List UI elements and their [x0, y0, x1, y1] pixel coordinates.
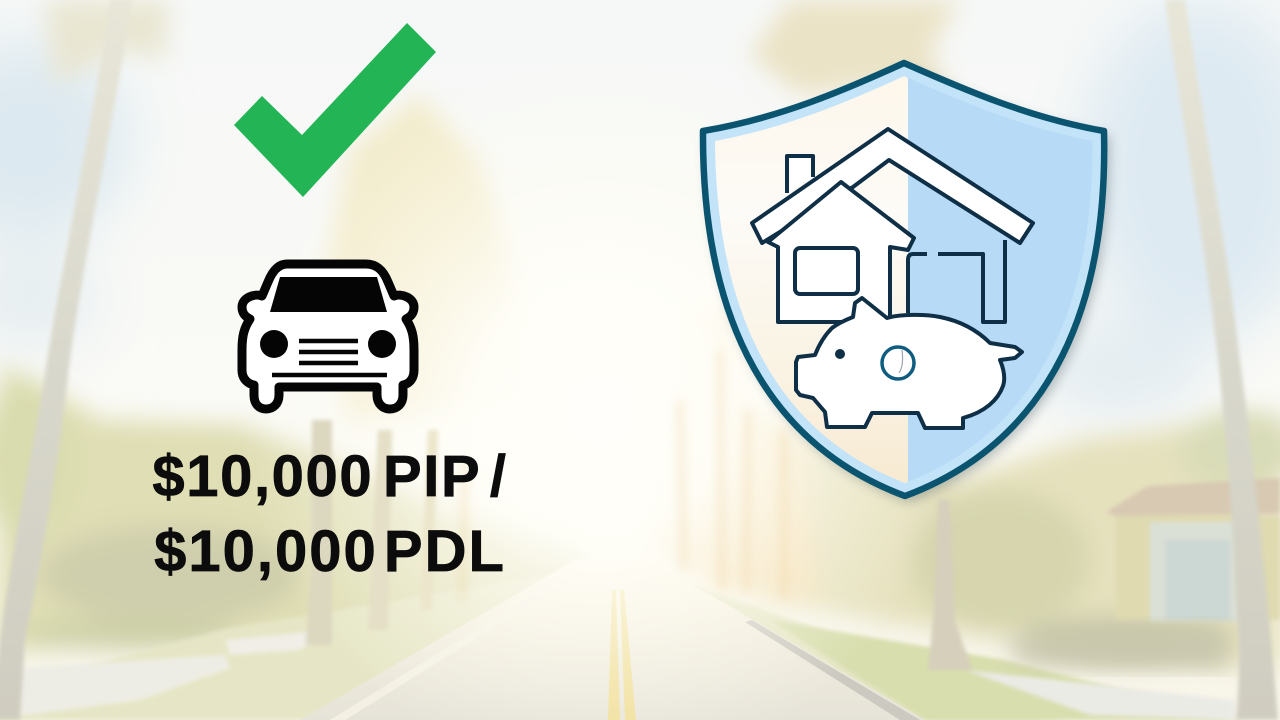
text: PIP amount: $10,000 PIP / [152, 444, 508, 509]
right vegetation [650, 380, 1280, 670]
palm fronds [45, 0, 960, 420]
house [752, 129, 1033, 322]
icon: green check mark [234, 23, 436, 197]
shield body [703, 60, 1108, 500]
house at right [1106, 478, 1280, 622]
icon: shield with house and piggy bank [700, 60, 1116, 507]
text: coverage amounts [152, 444, 508, 584]
text: PDL amount: $10,000 PDL [154, 519, 506, 584]
ground and road [0, 572, 1060, 720]
piggy bank [796, 298, 1022, 428]
left vegetation [0, 365, 580, 650]
shield shadow [707, 68, 1109, 502]
icon: car front [238, 260, 418, 414]
